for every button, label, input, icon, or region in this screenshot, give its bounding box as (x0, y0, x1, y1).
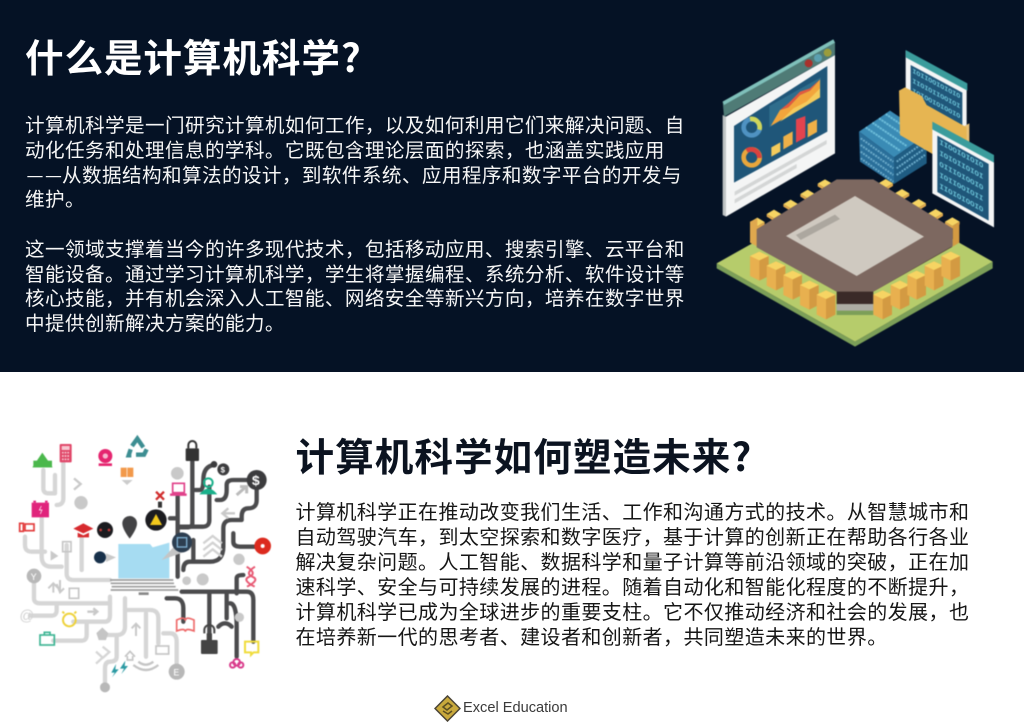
icon: teal recycle symbol (129, 439, 147, 455)
icon: binary data window behind folder: IOIIOOIOIOIO (912, 68, 961, 102)
logo: Excel Education (434, 695, 568, 722)
title: how computer science shapes the future: 计算机科学如何塑造未来? (296, 427, 752, 483)
icon: small monitor and house (63, 542, 169, 660)
icon: gold diamond logo mark (434, 695, 461, 722)
panel: dark header background (0, 0, 1024, 372)
text block: definition of computer science: 计算机科学是一门研究计算机如何工作，以及如何利用它们来解决问题、自 (25, 109, 685, 138)
icon: green keyboard building (32, 453, 53, 467)
icon: circuit board and processor chip (717, 179, 993, 347)
text block: definition of computer science: 维护。 (25, 183, 85, 212)
icon: binary data window behind folder: IIOIOIIOOIOI (912, 78, 960, 111)
icon: pink DNA (246, 567, 255, 587)
icon: blue data cube (859, 111, 927, 184)
icon: yellow note (245, 642, 258, 655)
icon: dashboard window (723, 39, 835, 217)
icon: binary data window behind folder (906, 50, 967, 130)
text block: impact of computer science: 解决复杂问题。人工智能、数据科学和量子计算等前沿领域的突破，正在加 (296, 546, 969, 575)
icon: biohazard (230, 659, 243, 668)
icon: lock with dollar (186, 441, 199, 461)
text block: definition of computer science: 智能设备。通过学习计算机科学，学生将掌握编程、系统分析、软件设计等 (25, 258, 685, 286)
text block: definition of computer science: 核心技能，并有机会深入人工智能、网络安全等新兴方向，培养在数字世界 (25, 282, 685, 311)
icon: teal briefcase (40, 632, 54, 645)
title: what is computer science: 什么是计算机科学? (25, 28, 362, 84)
icon: red disc (254, 538, 271, 554)
icon: at sign: @ (19, 609, 34, 625)
icon: dollar coins (211, 461, 267, 490)
illustration: technology network around a laptop (18, 434, 272, 693)
icon: teal lightning bolts (111, 661, 128, 677)
text block: impact of computer science: 速科学、安全与可持续发展的进程。随着自动化和智能化程度的不断提升， (296, 571, 969, 600)
icon: grey circles with currency: E (173, 669, 179, 680)
icon: yellow alarm clock (62, 612, 76, 626)
dark circuit lines (167, 460, 257, 657)
icon: pink battery (32, 501, 49, 517)
text block: definition of computer science: 中提供创新解决方案的能力。 (25, 307, 285, 336)
icon: grey circles with currency (27, 569, 185, 692)
text: brand name: Excel Education (463, 700, 568, 716)
icon: pink laptop (170, 483, 187, 495)
icon: binary data window front: IIOIOIOOIO (939, 182, 984, 215)
icon: orange book (121, 468, 133, 485)
icon: binary data window front: IOIOIIOIOI (939, 149, 984, 182)
icon: red graduation cap (73, 523, 93, 537)
icon: grey play buttons and arrows (48, 467, 247, 664)
icon: grey circles with currency: Y (31, 573, 37, 584)
icon: pink calculator (60, 444, 72, 462)
icon: binary data window behind folder: IOIOOIOIOOIO (912, 88, 961, 122)
icon: map pin with circuit (162, 532, 192, 560)
text block: definition of computer science: 动化任务和处理信息的学科。它既包含理论层面的探索，也涵盖实践应用 (25, 134, 665, 163)
icon: dark padlock (201, 625, 218, 654)
icon: red computer monitor (20, 523, 34, 531)
icon: wifi waves (133, 662, 158, 670)
icon: binary data window front (932, 122, 994, 227)
icon: dark circle markers (94, 509, 167, 563)
icon: binary data window front: IIOOIOIOIO (939, 138, 984, 171)
icon: dollar coins: $ (220, 466, 225, 475)
illustration: isometric chip with data windows (716, 38, 995, 347)
icon: magenta webcam (98, 449, 112, 466)
text block: definition of computer science (25, 109, 685, 336)
text block: definition of computer science: — (26, 160, 44, 188)
text block: definition of computer science: — (45, 160, 62, 188)
text block: impact of computer science (296, 496, 969, 650)
text block: impact of computer science: 计算机科学正在推动改变我们生活、工作和沟通方式的技术。从智慧城市和 (296, 496, 969, 525)
text block: impact of computer science: 计算机科学已成为全球进步的重要支柱。它不仅推动经济和社会的发展，也 (296, 596, 969, 625)
icon: laptop screen (110, 543, 178, 595)
light grey circuit lines (25, 463, 177, 687)
icon: binary data window front: OIIIOIOOIO (939, 160, 984, 193)
icon: red cross (156, 492, 164, 508)
text block: definition of computer science: 这一领域支撑着当今的许多现代技术，包括移动应用、搜索引擎、云平台和 (25, 233, 685, 262)
icon: yellow folder (899, 87, 969, 174)
text block: definition of computer science: 从数据结构和算法的设计，到软件系统、应用程序和数字平台的开发与 (62, 158, 682, 188)
text block: impact of computer science: 在培养新一代的思考者、建设者和创新者，共同塑造未来的世界。 (296, 621, 888, 650)
icon: binary data window front: IOIIOOIOII (939, 171, 984, 204)
text block: impact of computer science: 自动驾驶汽车，到太空探索和数字医疗，基于计算的创新正在帮助各行各业 (296, 521, 969, 550)
icon: red open book (177, 618, 194, 632)
icon: green person (202, 478, 215, 493)
icon: dollar coins: $ (252, 474, 260, 490)
